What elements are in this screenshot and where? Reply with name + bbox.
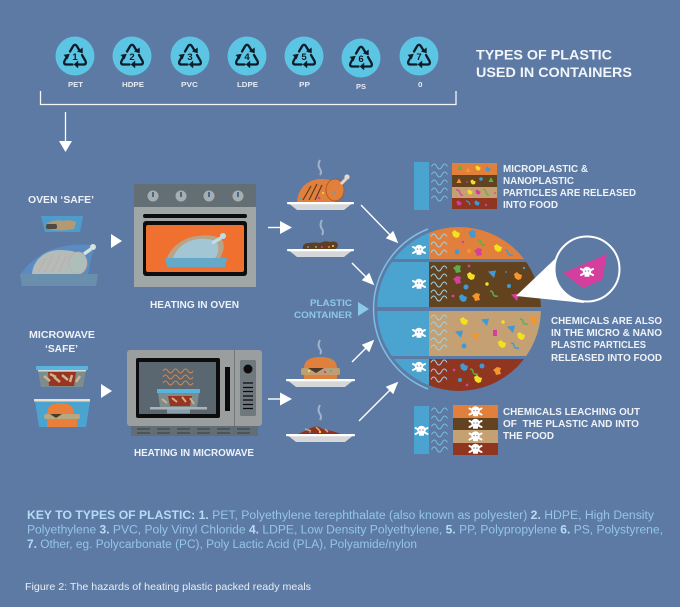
legend food bands with particles [452,163,497,209]
legend: chemicals leaching [414,405,640,455]
key to types of plastic: Polyethylene 3. PVC, Poly Vinyl Chloride 4. LDPE, Low Density Polyethylene, 5. PP, Polypropylene 6. PS, Polystyrene, [27,524,663,536]
turkey in oven [165,233,227,267]
oven body [134,207,256,287]
plate: roast turkey [287,160,354,210]
icon: burger container [34,399,90,427]
icon: PP 5 [284,36,324,76]
plastic type labels: 0 [418,80,422,89]
microwave interior [139,362,216,414]
icon: PET 1 [56,36,94,76]
heading: oven safe: OVEN ‘SAFE’ [28,195,94,206]
icon: HDPE 2 [112,36,152,76]
icon: PS 6 [342,38,380,78]
title [476,46,632,80]
legend text: leaching: OF THE PLASTIC AND INTO [503,419,639,430]
legend text: leaching: CHEMICALS LEACHING OUT [503,407,640,418]
arrow: microwave to plates [268,392,292,406]
microwave [127,350,262,459]
label: plastic container [294,298,369,321]
oven safe packaging [20,195,98,286]
plastic type labels: PP [299,80,310,89]
oven handle [143,214,247,218]
icon: food container [36,366,88,387]
bracket [40,91,456,104]
leaching waves [431,234,447,382]
icon: other 7: 7 [416,52,422,63]
legend waves [432,164,447,201]
plastic type icons [56,36,438,91]
key to types of plastic: 7. Other, eg. Polycarbonate (PC), Poly Lactic Acid (PLA), Polyamide/nylon [27,539,417,551]
microwave control panel [240,360,256,416]
legend text: microplastic: INTO FOOD [503,200,558,211]
oven control panel [134,184,256,207]
plastic type labels: PET [68,80,83,89]
legend text: microplastic: PARTICLES ARE RELEASED [503,188,636,199]
callout: chemical particle magnifier [516,236,620,303]
oven window [143,221,247,276]
legend waves [432,408,447,452]
plate: burger [286,340,355,387]
key to types of plastic: KEY TO TYPES OF PLASTIC: 1. PET, Polyethylene terephthalate (also known as polyester) 2. HDPE, High Density [27,510,654,522]
legend text: chemicals in particles: IN THE MICRO & NANO [551,328,662,339]
container in microwave [150,389,207,414]
legend text: leaching: THE FOOD [503,431,554,442]
oven interior [146,225,244,272]
container wall [374,229,428,389]
microwave door slot [225,367,230,411]
skulls in container wall [413,245,425,372]
plastic type labels: PVC [181,80,199,89]
arrow: oven to plates [268,221,292,234]
microwave label: HEATING IN MICROWAVE [134,448,254,459]
oven [134,184,256,311]
arrow: to oven [111,234,122,248]
icon: PVC 3: 3 [187,52,193,63]
legend text: chemicals in particles [551,316,662,364]
icon: pink particle with skull [563,254,607,288]
microwave body [127,350,262,426]
key to types of plastic [27,510,663,551]
icon: LDPE 4: 4 [244,52,250,63]
heading: microwave safe: ‘SAFE’ [45,344,78,355]
legend text: microplastic [503,164,636,211]
container and food cross-section diagram [374,227,541,391]
icon: LDPE 4 [228,36,266,76]
plastic type labels: PS [356,82,366,91]
label: plastic container: CONTAINER [294,310,352,321]
icon: PET 1: 1 [72,52,78,63]
legend text: microplastic: MICROPLASTIC & [503,164,588,175]
legend food bands with skulls [453,405,498,455]
icon: PVC 3 [170,36,210,76]
legend text: microplastic: NANOPLASTIC [503,176,574,187]
microwave feet [131,424,258,436]
plastic type labels: HDPE [122,80,144,89]
arrow: to microwave [101,384,112,398]
legend text: chemicals in particles: PLASTIC PARTICLES [551,340,646,351]
legend swatch: plastic wall [414,162,429,210]
icon: other 7 [400,36,438,76]
microwave safe packaging [29,330,95,427]
icon: HDPE 2: 2 [129,52,135,63]
microwave waves [163,369,193,385]
legend swatch: plastic wall with skull [414,406,429,454]
figure caption: Figure 2: The hazards of heating plastic packed ready meals [25,581,311,593]
cross-section bands [377,227,541,391]
icon: small oven tray [41,216,83,232]
plastic type labels: LDPE [237,80,258,89]
icon: PP 5: 5 [301,52,307,63]
arrow: down [59,112,72,152]
oven label: HEATING IN OVEN [150,300,239,311]
legend text: leaching [503,407,640,442]
arrows: plates to container [352,205,397,421]
title: TYPES OF PLASTIC [476,46,612,62]
label: plastic container: PLASTIC [310,298,352,309]
icon: turkey in film tray [20,244,98,286]
legend: microplastic release [414,162,636,211]
legend text: chemicals in particles: CHEMICALS ARE ALSO [551,316,662,327]
plate: pasta [286,405,355,442]
title: USED IN CONTAINERS [476,64,632,80]
plate: stew [287,220,354,257]
heading: microwave safe [29,330,95,355]
icon: PS 6: 6 [358,54,364,65]
plastic particles [452,230,537,386]
microwave window [136,358,220,418]
microwave divider [234,350,235,426]
legend text: chemicals in particles: RELEASED INTO FOOD [551,353,662,364]
plastic type labels [68,80,422,91]
heading: microwave safe: MICROWAVE [29,330,95,341]
